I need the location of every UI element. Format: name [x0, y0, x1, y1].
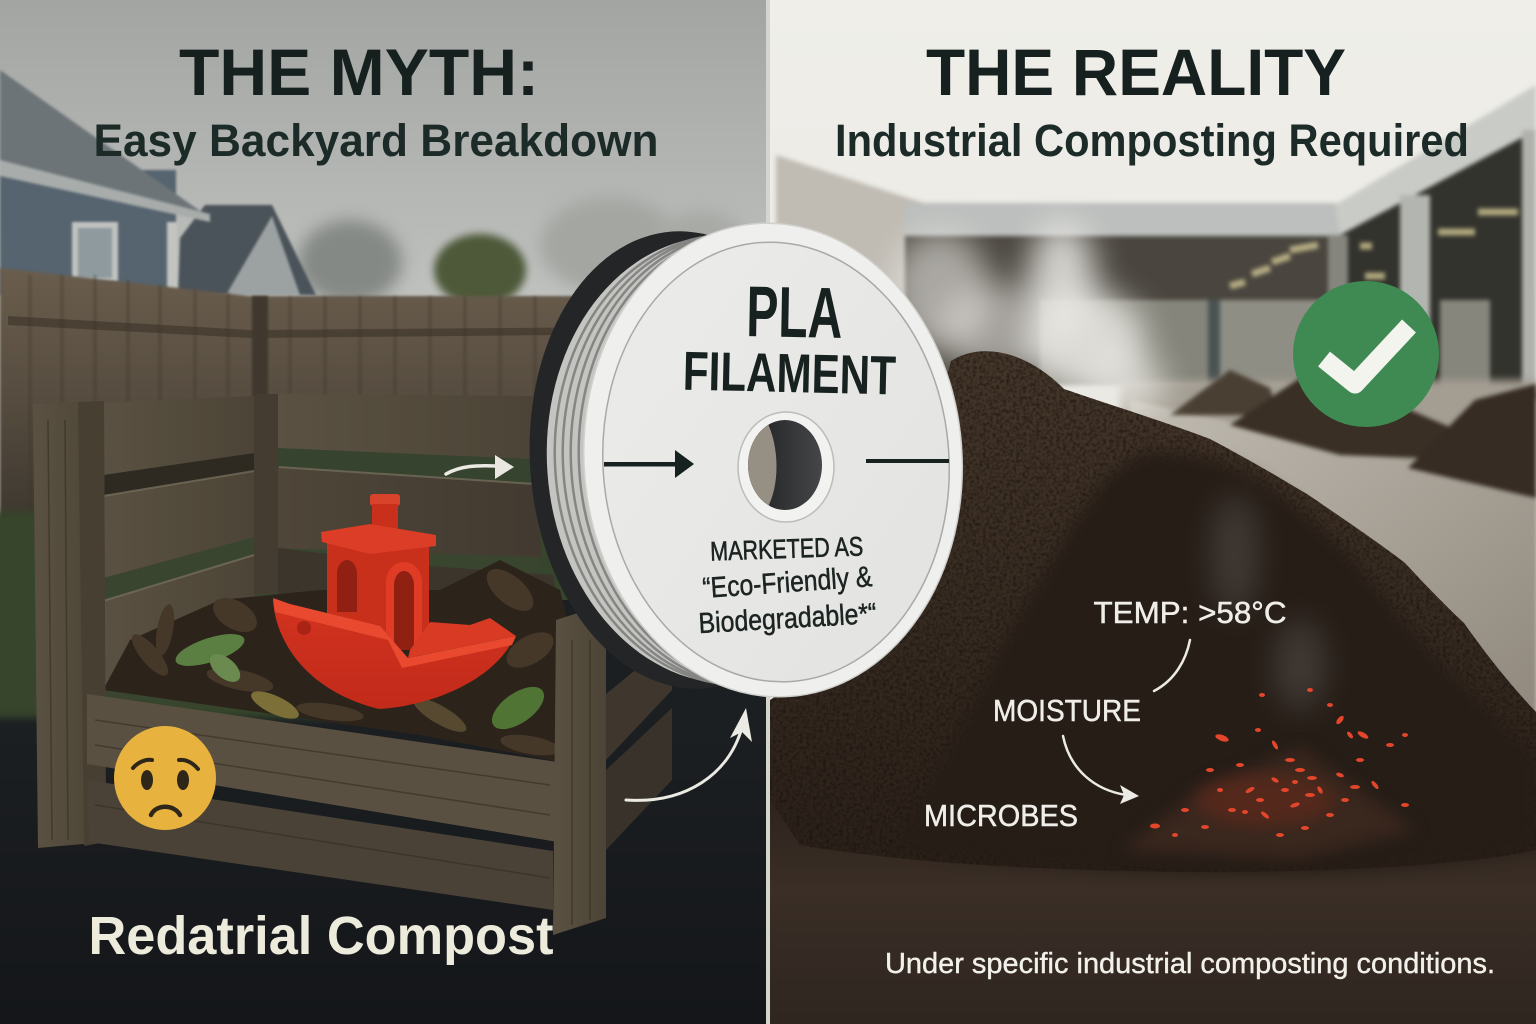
label: microbes: MICROBES — [924, 798, 1078, 833]
arrow: bin to spool lower — [626, 708, 752, 800]
label: temperature: TEMP: >58°C — [1094, 595, 1286, 630]
icon: sad face emoji — [114, 726, 216, 830]
icon: red 3D printed boat — [273, 494, 516, 709]
heading: the myth: THE MYTH: — [179, 35, 539, 109]
steam — [890, 220, 1165, 420]
smoke wisp — [1213, 495, 1257, 615]
label: marketed as: MARKETED AS — [710, 531, 864, 567]
PLA filament spool — [530, 222, 963, 698]
heading: the reality — [835, 35, 1469, 166]
fence — [0, 267, 572, 518]
subheading: easy backyard breakdown: Easy Backyard Breakdown — [94, 115, 658, 166]
compost bin back — [103, 394, 560, 700]
background trees — [298, 197, 750, 304]
compost mound — [770, 351, 1536, 872]
flange inner ring — [588, 230, 964, 694]
caption: redatrial compost: Redatrial Compost — [88, 906, 554, 966]
panel: the reality industrial composting scene — [770, 0, 1536, 1024]
arrow: into hub — [604, 450, 694, 478]
building — [776, 85, 1536, 400]
mound cavity — [900, 453, 1536, 871]
ground — [770, 800, 1536, 1024]
heading: the reality: THE REALITY — [926, 35, 1346, 109]
spool rear flange — [514, 221, 862, 699]
center hole — [738, 412, 834, 522]
label: biodegradable: Biodegradable*“ — [698, 598, 877, 640]
subheading: industrial composting required: Industrial Composting Required — [835, 115, 1469, 166]
label: moisture: MOISTURE — [993, 693, 1141, 728]
label: eco-friendly: “Eco-Friendly & — [701, 561, 873, 605]
compost bin front — [33, 401, 672, 935]
caption: industrial conditions: Under specific industrial composting conditions. — [885, 948, 1495, 980]
arrow: bin to spool upper — [446, 455, 514, 479]
line: out of hub — [866, 459, 949, 463]
panel: the myth backyard scene — [0, 0, 786, 1024]
compost leaves — [103, 560, 567, 762]
spool front flange — [568, 210, 978, 710]
glowing soil pile — [1122, 748, 1415, 858]
distant compost piles — [1170, 370, 1536, 498]
connector: temp to moisture — [1154, 640, 1190, 691]
arrow: moisture to microbes — [1063, 736, 1139, 804]
label: PLA: PLA — [746, 272, 843, 354]
icon: green check badge — [1293, 281, 1439, 427]
heading: the myth — [94, 35, 658, 166]
house — [0, 70, 316, 295]
road and haze — [1120, 380, 1536, 720]
filament winding — [532, 219, 959, 701]
label: FILAMENT: FILAMENT — [682, 340, 897, 406]
red microbes — [1150, 688, 1409, 837]
center divider — [766, 0, 770, 1024]
grass and ground — [0, 508, 568, 724]
